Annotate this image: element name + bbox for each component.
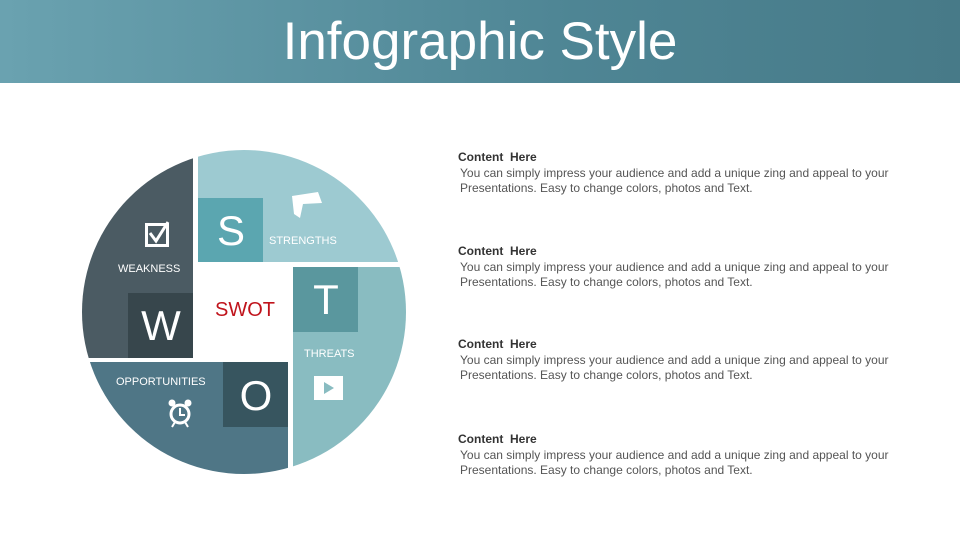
text block 4: Content Here: [458, 432, 537, 446]
text block 1: [458, 150, 889, 195]
box O: O: [240, 372, 272, 419]
box S: S: [217, 207, 245, 254]
icon: checkbox: [145, 222, 169, 247]
box W: [128, 293, 193, 358]
box T: T: [313, 276, 339, 323]
text block 1: Content Here: [458, 150, 537, 164]
box S: [198, 198, 263, 262]
label: strengths: STRENGTHS: [269, 235, 337, 247]
label: threats: THREATS: [304, 348, 355, 360]
text block 2: [458, 244, 889, 289]
center SWOT text: SWOT: [215, 299, 275, 321]
segment: opportunities: [90, 362, 288, 474]
title: Infographic Style: [283, 12, 677, 71]
header bar: [0, 0, 960, 83]
segment: threats: [293, 267, 406, 466]
segment: strengths: [198, 150, 398, 262]
text block 2: Content Here: [458, 244, 537, 258]
icon: megaphone: [292, 192, 322, 218]
label: opportunities: OPPORTUNITIES: [116, 376, 206, 388]
box T: [293, 267, 358, 332]
text block 4: You can simply impress your audience and add a unique zing and appeal to your Presentations. Easy to change colors, photos and Text.: [460, 448, 889, 477]
text block 3: [458, 337, 889, 382]
SWOT circle chart: [82, 150, 406, 474]
icon: video: [314, 376, 343, 400]
text block 3: Content Here: [458, 337, 537, 351]
box O: [223, 362, 288, 427]
icon: alarm clock: [168, 400, 192, 427]
text block 1: You can simply impress your audience and add a unique zing and appeal to your Presentations. Easy to change colors, photos and Text.: [460, 166, 889, 195]
text block 3: You can simply impress your audience and add a unique zing and appeal to your Presentations. Easy to change colors, photos and Text.: [460, 353, 889, 382]
box W: W: [141, 302, 181, 349]
label: weakness: WEAKNESS: [118, 263, 180, 275]
text block 4: [458, 432, 889, 477]
text block 2: You can simply impress your audience and add a unique zing and appeal to your Presentations. Easy to change colors, photos and Text.: [460, 260, 889, 289]
segment: weakness: [82, 158, 193, 358]
